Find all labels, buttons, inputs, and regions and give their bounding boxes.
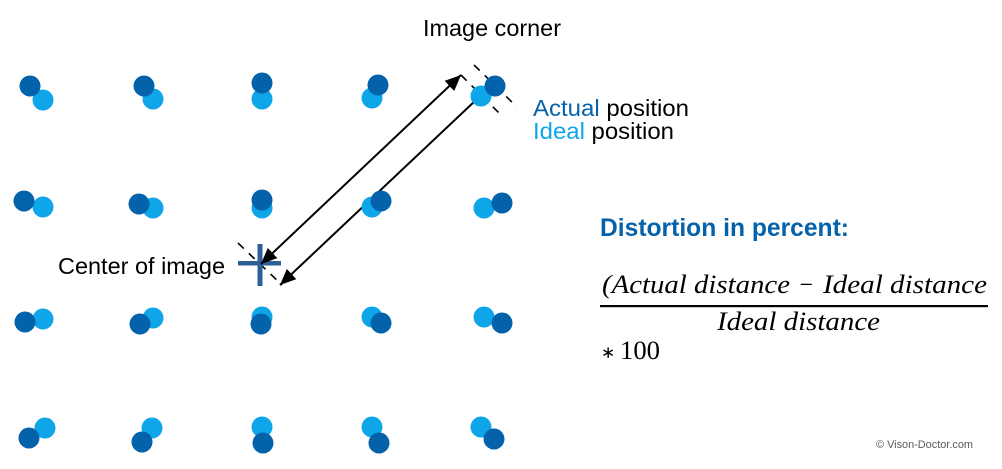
- label: image corner: Image corner: [423, 15, 561, 41]
- fraction bar: [600, 305, 988, 307]
- legend: ideal position: Ideal position: [533, 118, 674, 144]
- heading: distortion in percent: Distortion in percent:: [600, 214, 849, 242]
- multiplication sign: ∗: [601, 343, 615, 363]
- formula: [600, 270, 988, 365]
- dashed extent lines: [238, 65, 517, 285]
- numerator: ideal distance: Ideal distance: [822, 270, 987, 299]
- denominator: Ideal distance: [716, 307, 880, 336]
- numerator: actual distance: (Actual distance: [602, 270, 790, 299]
- actual position dots: [14, 72, 512, 454]
- copyright: © Vison-Doctor.com: [876, 439, 973, 451]
- label: center of image: Center of image: [58, 253, 225, 279]
- multiplier value: 100: [620, 336, 660, 365]
- arrow: ideal distance: [280, 100, 476, 285]
- ideal position dots: [32, 86, 494, 438]
- arrow: actual distance: [261, 75, 461, 264]
- center cross: [238, 244, 281, 286]
- minus sign: −: [798, 270, 814, 299]
- legend: actual position: Actual position: [533, 95, 689, 121]
